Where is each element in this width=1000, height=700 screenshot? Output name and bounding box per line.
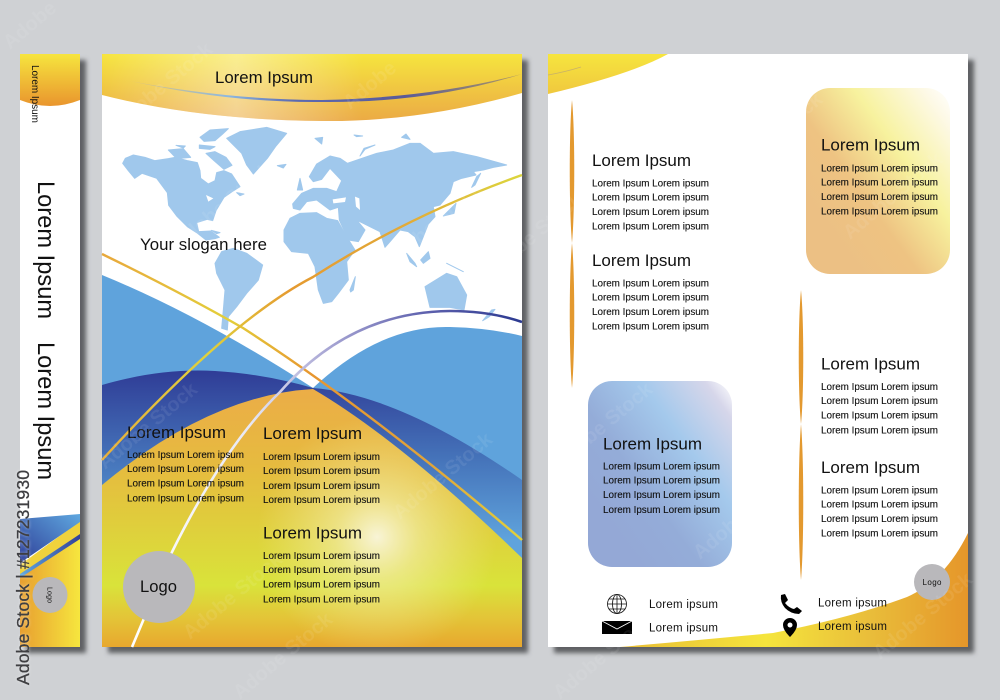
spine dark stripe xyxy=(20,534,80,578)
icon: phone xyxy=(781,594,802,614)
text block: column one: Lorem Ipsum xyxy=(127,423,226,442)
text block: left lower: Lorem Ipsum Lorem ipsum xyxy=(592,322,709,332)
text block: column two bottom: Lorem Ipsum Lorem ipsum xyxy=(263,551,380,562)
contact text: Lorem ipsum xyxy=(649,622,718,634)
crossing line orange to yellow xyxy=(102,254,522,540)
stock watermark: Adobe Stock xyxy=(689,468,798,564)
orange rounded box: Lorem Ipsum Lorem ipsum xyxy=(821,192,938,203)
text block: left lower: Lorem Ipsum xyxy=(592,251,691,270)
header title: Lorem Ipsum xyxy=(215,68,313,87)
text block: right lower xyxy=(821,458,938,540)
orange rounded box: Lorem Ipsum xyxy=(821,136,920,154)
dark blue arc xyxy=(102,371,522,560)
logo xyxy=(123,551,195,623)
text block: column two top: Lorem Ipsum Lorem ipsum xyxy=(263,466,380,477)
text block: right lower: Lorem Ipsum Lorem ipsum xyxy=(821,528,938,540)
text block: left upper: Lorem Ipsum Lorem ipsum xyxy=(592,207,709,218)
text block: right lower: Lorem Ipsum xyxy=(821,458,920,477)
stock watermark: Adobe Stock xyxy=(179,548,288,644)
text block: right lower: Lorem Ipsum Lorem ipsum xyxy=(821,514,938,525)
blue rounded box: Lorem Ipsum Lorem ipsum xyxy=(603,476,720,486)
spine bottom gold block xyxy=(20,530,80,647)
panel: spine xyxy=(20,54,80,647)
orange rounded box: Lorem Ipsum Lorem ipsum xyxy=(821,178,938,188)
text block: left upper: Lorem Ipsum Lorem ipsum xyxy=(592,192,709,204)
text block: right upper: Lorem Ipsum Lorem ipsum xyxy=(821,410,938,422)
spine large title two: Lorem Ipsum xyxy=(32,342,58,480)
stock watermark: Adobe Stock xyxy=(109,38,218,134)
stock watermark: Adobe Stock xyxy=(389,428,498,524)
icon: globe xyxy=(608,594,626,614)
text block: left upper: Lorem Ipsum xyxy=(592,151,691,170)
contact text: Lorem ipsum xyxy=(818,598,887,610)
stock watermark: Adobe Stock xyxy=(869,568,978,664)
left orange divider xyxy=(570,100,574,388)
gold arc xyxy=(102,389,522,647)
text block: right upper: Lorem Ipsum xyxy=(821,354,920,374)
text block: column one: Lorem Ipsum Lorem ipsum xyxy=(127,478,244,490)
stock id: Adobe Stock | #127231930 xyxy=(13,470,33,685)
text block: left lower: Lorem Ipsum Lorem ipsum xyxy=(592,278,709,290)
bottom gold wave xyxy=(620,533,968,647)
text block: right lower: Lorem Ipsum Lorem ipsum xyxy=(821,500,938,510)
spine yellow stripe xyxy=(20,521,80,574)
stock id: Adobe Stock | #127231930 xyxy=(13,470,33,685)
text block: column two top: Lorem Ipsum Lorem ipsum xyxy=(263,481,380,492)
text block: left lower: Lorem Ipsum Lorem ipsum xyxy=(592,292,709,304)
text block: column two top xyxy=(263,424,380,506)
spine large title one: Lorem Ipsum xyxy=(32,181,58,319)
slogan: Your slogan here xyxy=(140,235,267,254)
stock watermark: Adobe Stock xyxy=(719,88,828,184)
right orange divider xyxy=(799,290,803,580)
stock watermark: Adobe Stock xyxy=(479,188,588,284)
text block: left upper: Lorem Ipsum Lorem ipsum xyxy=(592,222,709,232)
stock watermark: Adobe Stock xyxy=(94,378,203,474)
text block: right lower: Lorem Ipsum Lorem ipsum xyxy=(821,486,938,496)
stock watermark: Adobe Stock xyxy=(379,178,488,274)
text block: column one: Lorem Ipsum Lorem ipsum xyxy=(127,494,244,504)
text block: column two top: Lorem Ipsum Lorem ipsum xyxy=(263,452,380,463)
text block: column two bottom: Lorem Ipsum Lorem ipsum xyxy=(263,580,380,590)
icon: location pin xyxy=(783,618,797,637)
spine small title: Lorem Ipsum xyxy=(29,65,40,123)
blue rounded box: Lorem Ipsum Lorem ipsum xyxy=(603,462,720,472)
orange rounded box: Lorem Ipsum Lorem ipsum xyxy=(821,164,938,174)
spine logo xyxy=(32,577,68,613)
logo: Logo xyxy=(140,577,177,596)
contact text xyxy=(649,598,887,634)
spine blue wedge xyxy=(20,514,80,563)
white to purple arc xyxy=(132,311,522,647)
text block: left upper xyxy=(592,151,709,232)
contact text: Lorem ipsum xyxy=(818,621,887,633)
panel: back page xyxy=(548,54,968,647)
contact text: Lorem ipsum xyxy=(649,599,718,611)
back logo xyxy=(914,564,950,600)
blue rounded box xyxy=(588,381,732,567)
blue waves xyxy=(102,275,522,560)
spine logo: Logo xyxy=(46,587,52,603)
header band xyxy=(102,54,522,121)
top corner wedge xyxy=(548,54,668,94)
icon: envelope xyxy=(602,621,632,634)
world map xyxy=(123,127,507,330)
blue rounded box: Lorem Ipsum Lorem ipsum xyxy=(603,505,720,516)
text block: left lower xyxy=(592,251,709,332)
text block: right upper xyxy=(821,354,938,436)
text block: right upper: Lorem Ipsum Lorem ipsum xyxy=(821,396,938,407)
text block: column two bottom xyxy=(263,524,380,606)
text block: column two bottom: Lorem Ipsum Lorem ipsum xyxy=(263,594,380,606)
blue rounded box: Lorem Ipsum xyxy=(603,434,702,454)
text block: column two top: Lorem Ipsum Lorem ipsum xyxy=(263,495,380,506)
text block: left lower: Lorem Ipsum Lorem ipsum xyxy=(592,307,709,318)
crossing line yellow to orange xyxy=(102,175,522,460)
panel: front cover xyxy=(102,54,522,647)
text block: right upper: Lorem Ipsum Lorem ipsum xyxy=(821,426,938,436)
text block: column two bottom: Lorem Ipsum Lorem ipsum xyxy=(263,565,380,576)
spine top cap xyxy=(20,54,80,106)
text block: right upper: Lorem Ipsum Lorem ipsum xyxy=(821,382,938,393)
stock watermark: Adobe Stock xyxy=(169,158,278,254)
text block: column two bottom: Lorem Ipsum xyxy=(263,524,362,542)
orange rounded box: Lorem Ipsum Lorem ipsum xyxy=(821,206,938,218)
stock watermark: Adobe Stock xyxy=(839,288,948,384)
stock watermark: Adobe xyxy=(339,57,401,114)
text block: column one: Lorem Ipsum Lorem ipsum xyxy=(127,464,244,475)
stock watermark: Adobe Stock xyxy=(839,148,948,244)
stock watermark: Adobe Stock xyxy=(549,378,658,474)
text block: column one: Lorem Ipsum Lorem ipsum xyxy=(127,450,244,461)
blue rounded box: Lorem Ipsum Lorem ipsum xyxy=(603,490,720,501)
orange rounded box xyxy=(806,88,950,274)
back logo: Logo xyxy=(922,578,942,587)
text block: left upper: Lorem Ipsum Lorem ipsum xyxy=(592,178,709,190)
text block: column one xyxy=(127,423,244,504)
text block: column two top: Lorem Ipsum xyxy=(263,424,362,443)
